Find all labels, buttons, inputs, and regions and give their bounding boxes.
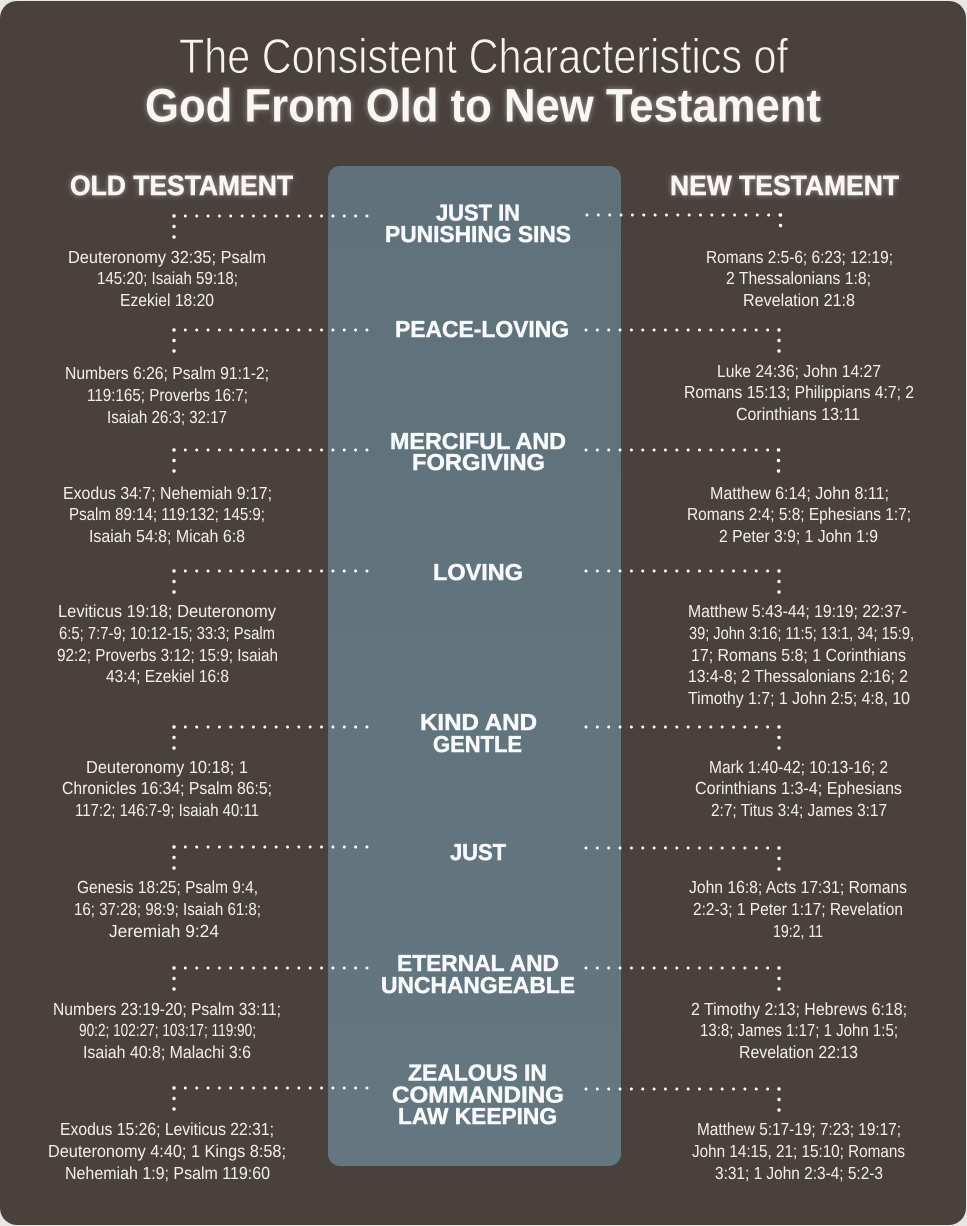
old testament references: row 5: 117:2; 146:7-9; Isaiah 40:11 — [75, 800, 259, 820]
connector: row 6 left — [174, 847, 368, 869]
old testament references: row 4: Leviticus 19:18; Deuteronomy — [58, 601, 276, 621]
new testament references: row 1: 2 Thessalonians 1:8; — [726, 268, 871, 288]
old testament references: row 2 — [65, 363, 269, 427]
old testament references: row 5 — [62, 757, 272, 820]
old testament references: row 7: 90:2; 102:27; 103:17; 119:90; — [79, 1020, 256, 1040]
characteristic: kind and gentle: KIND AND — [420, 709, 537, 735]
characteristic: merciful and forgiving: FORGIVING — [412, 449, 545, 475]
characteristic: zealous in commanding law keeping: ZEALOUS IN — [408, 1060, 547, 1086]
heading: New Testament: NEW TESTAMENT — [670, 170, 899, 201]
new testament references: row 4: Timothy 1:7; 1 John 2:5; 4:8, 10 — [688, 688, 910, 708]
characteristic: just: JUST — [450, 839, 506, 865]
title: The Consistent Characteristics of — [179, 30, 788, 84]
new testament references: row 8: 3:31; 1 John 2:3-4; 5:2-3 — [715, 1163, 883, 1183]
characteristic: kind and gentle — [420, 709, 537, 757]
new testament references: row 1 — [706, 247, 893, 310]
new testament references: row 5: 2:7; Titus 3:4; James 3:17 — [711, 800, 887, 820]
connector: row 8 left — [174, 1088, 368, 1110]
connector: row 7 right — [586, 968, 780, 990]
old testament references: row 8: Nehemiah 1:9; Psalm 119:60 — [65, 1163, 270, 1183]
connector: row 1 left — [174, 216, 368, 238]
old testament references: row 1: 145:20; Isaiah 59:18; — [97, 268, 238, 288]
new testament references: row 2: Romans 15:13; Philippians 4:7; 2 — [684, 382, 914, 402]
new testament references: row 5: Corinthians 1:3-4; Ephesians — [695, 778, 902, 798]
new testament references: row 4: Matthew 5:43-44; 19:19; 22:37- — [688, 601, 907, 621]
old testament references: row 2: Numbers 6:26; Psalm 91:1-2; — [65, 363, 269, 383]
new testament references: row 2 — [684, 361, 914, 424]
panel: central characteristics column — [328, 166, 621, 1166]
new testament references: row 2: Luke 24:36; John 14:27 — [717, 361, 881, 381]
new testament references: row 4 — [688, 601, 914, 708]
connector: row 2 left — [174, 330, 368, 352]
old testament references: row 2: Isaiah 26:3; 32:17 — [107, 407, 227, 427]
connector: row 3 right — [586, 450, 779, 472]
old testament references: row 7: Isaiah 40:8; Malachi 3:6 — [83, 1042, 251, 1062]
characteristic: loving: LOVING — [433, 559, 523, 585]
old testament references: row 4 — [57, 601, 278, 686]
new testament references: row 4: 39; John 3:16; 11:5; 13:1, 34; 15:9, — [689, 623, 914, 643]
connector: row 6 right — [586, 848, 780, 870]
old testament references: row 8: Exodus 15:26; Leviticus 22:31; — [60, 1119, 274, 1139]
characteristic: just in punishing sins: PUNISHING SINS — [385, 221, 571, 247]
old testament references: row 8: Deuteronomy 4:40; 1 Kings 8:58; — [48, 1141, 286, 1161]
characteristic: merciful and forgiving: MERCIFUL AND — [390, 428, 566, 454]
connector: row 4 right — [586, 571, 780, 593]
new testament references: row 6: John 16:8; Acts 17:31; Romans — [689, 877, 907, 897]
old testament references: row 3: Isaiah 54:8; Micah 6:8 — [89, 526, 245, 546]
connector: row 2 right — [586, 330, 780, 352]
connector: row 1 right — [587, 215, 781, 236]
new testament references: row 7: Revelation 22:13 — [739, 1042, 858, 1062]
new testament references: row 3: Matthew 6:14; John 8:11; — [710, 483, 889, 503]
old testament references: row 2: 119:165; Proverbs 16:7; — [87, 385, 248, 405]
old testament references: row 5: Deuteronomy 10:18; 1 — [86, 757, 248, 777]
new testament references: row 2: Corinthians 13:11 — [736, 404, 860, 424]
new testament references: row 6: 2:2-3; 1 Peter 1:17; Revelation — [693, 899, 903, 919]
old testament references: row 4: 43:4; Ezekiel 16:8 — [106, 666, 229, 686]
characteristic: eternal and unchangeable: ETERNAL AND — [397, 950, 559, 976]
new testament references: row 1: Romans 2:5-6; 6:23; 12:19; — [706, 247, 893, 267]
old testament references: row 4: 6:5; 7:7-9; 10:12-15; 33:3; Psalm — [59, 623, 275, 643]
title: God From Old to New Testament — [145, 78, 821, 132]
characteristic: just in punishing sins: JUST IN — [436, 200, 520, 226]
new testament references: row 7: 2 Timothy 2:13; Hebrews 6:18; — [691, 999, 907, 1019]
new testament references: row 5 — [695, 757, 902, 820]
characteristic: zealous in commanding law keeping: LAW KEEPING — [398, 1103, 557, 1129]
characteristic: kind and gentle: GENTLE — [433, 731, 522, 757]
new testament references: row 4: 17; Romans 5:8; 1 Corinthians — [691, 645, 906, 665]
new testament references: row 3: 2 Peter 3:9; 1 John 1:9 — [719, 526, 878, 546]
old testament references: row 6: Genesis 18:25; Psalm 9:4, — [77, 877, 258, 897]
characteristic: eternal and unchangeable: UNCHANGEABLE — [381, 972, 575, 998]
old testament references: row 6: Jeremiah 9:24 — [109, 921, 219, 941]
characteristic: zealous in commanding law keeping — [392, 1060, 564, 1129]
connector: row 5 left — [174, 727, 368, 749]
connector: row 4 left — [174, 571, 368, 593]
heading: Old Testament: OLD TESTAMENT — [70, 170, 293, 201]
connector: row 3 left — [174, 450, 368, 472]
old testament references: row 4: 92:2; Proverbs 3:12; 15:9; Isaiah — [57, 645, 278, 665]
new testament references: row 8: John 14:15, 21; 15:10; Romans — [692, 1141, 905, 1161]
old testament references: row 3 — [63, 483, 272, 546]
new testament references: row 7 — [691, 999, 907, 1062]
new testament references: row 7: 13:8; James 1:17; 1 John 1:5; — [700, 1020, 898, 1040]
old testament references: row 6 — [74, 877, 261, 941]
old testament references: row 3: Psalm 89:14; 119:132; 145:9; — [69, 504, 265, 524]
new testament references: row 5: Mark 1:40-42; 10:13-16; 2 — [709, 757, 888, 777]
new testament references: row 8: Matthew 5:17-19; 7:23; 19:17; — [697, 1119, 901, 1139]
new testament references: row 8 — [692, 1119, 905, 1183]
old testament references: row 7: Numbers 23:19-20; Psalm 33:11; — [53, 999, 281, 1019]
new testament references: row 1: Revelation 21:8 — [743, 290, 855, 310]
connector: row 5 right — [586, 727, 780, 749]
old testament references: row 1: Deuteronomy 32:35; Psalm — [68, 247, 266, 267]
old testament references: row 5: Chronicles 16:34; Psalm 86:5; — [62, 778, 272, 798]
old testament references: row 6: 16; 37:28; 98:9; Isaiah 61:8; — [74, 899, 261, 919]
old testament references: row 8 — [48, 1119, 286, 1183]
characteristic: merciful and forgiving — [390, 428, 566, 475]
new testament references: row 3: Romans 2:4; 5:8; Ephesians 1:7; — [687, 504, 911, 524]
old testament references: row 1: Ezekiel 18:20 — [120, 290, 214, 310]
characteristic: just in punishing sins — [385, 200, 571, 247]
new testament references: row 4: 13:4-8; 2 Thessalonians 2:16; 2 — [688, 666, 908, 686]
connector: row 8 right — [586, 1089, 780, 1111]
characteristic: eternal and unchangeable — [381, 950, 575, 998]
new testament references: row 6 — [689, 877, 907, 941]
new testament references: row 6: 19:2, 11 — [773, 921, 823, 941]
connector: row 7 left — [174, 968, 368, 990]
old testament references: row 3: Exodus 34:7; Nehemiah 9:17; — [63, 483, 272, 503]
characteristic: peace-loving: PEACE-LOVING — [395, 316, 569, 342]
old testament references: row 7 — [53, 999, 281, 1062]
old testament references: row 1 — [68, 247, 266, 310]
title — [145, 30, 821, 132]
new testament references: row 3 — [687, 483, 911, 546]
characteristic: zealous in commanding law keeping: COMMANDING — [392, 1082, 564, 1108]
